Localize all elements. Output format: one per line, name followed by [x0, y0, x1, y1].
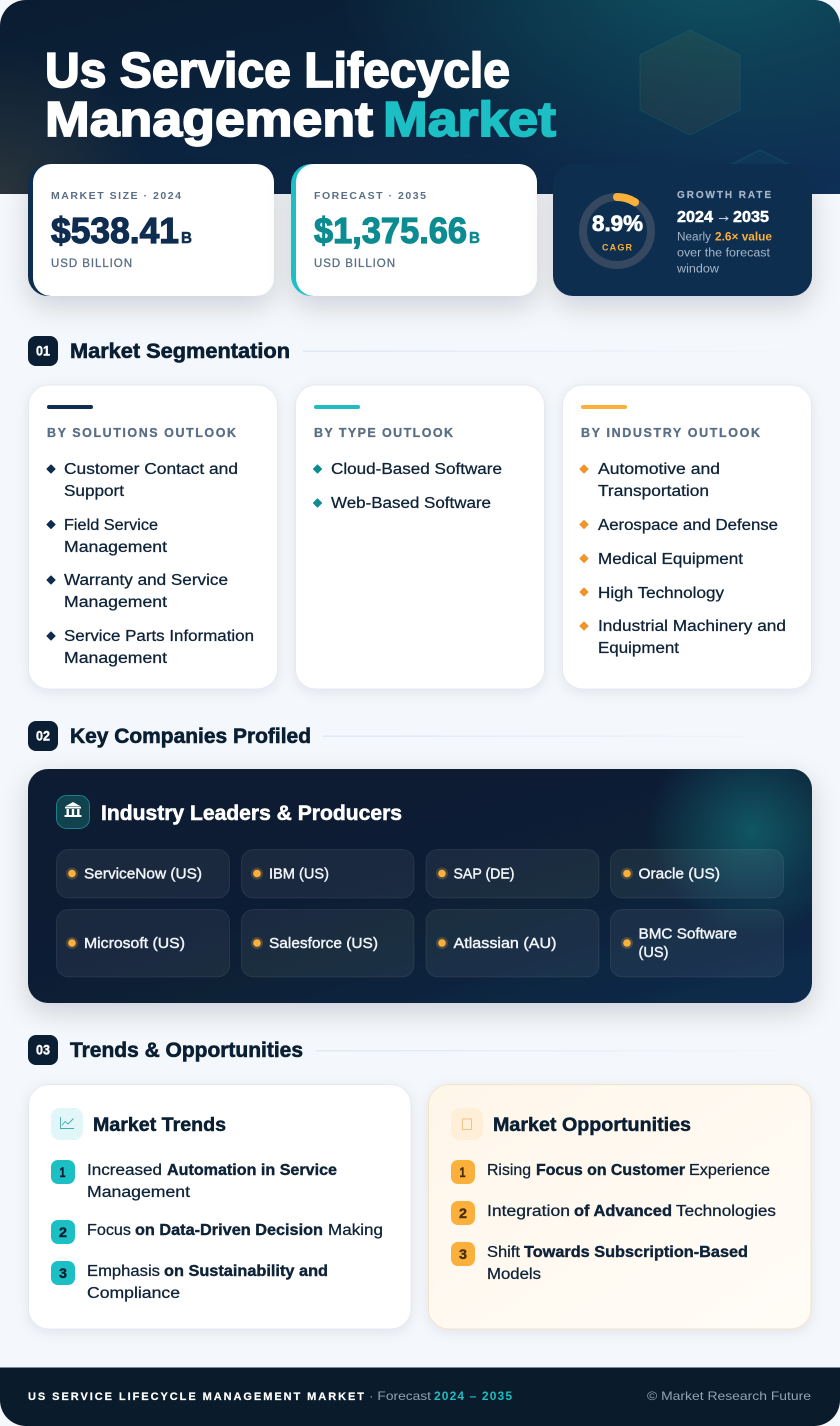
panel: by type outlook: Web-Based Software — [331, 495, 491, 512]
company: Oracle — [610, 850, 784, 898]
title: Market — [383, 92, 556, 147]
panel: market opportunities: Market Opportunities — [493, 1115, 691, 1136]
trend 1: Increased — [87, 1162, 162, 1179]
panel: by industry outlook — [562, 385, 812, 689]
panel: by solutions outlook: Warranty and Service — [64, 572, 228, 589]
panel: by solutions outlook: Management — [64, 594, 168, 611]
stat card: market size 2024: MARKET SIZE · 2024 — [51, 190, 181, 202]
opportunity 2: Technologies — [676, 1203, 776, 1220]
panel heading: Industry Leaders & Producers — [101, 802, 402, 825]
icon: classical building — [56, 796, 90, 828]
trend 1: Automation in Service — [167, 1162, 337, 1179]
opportunity 3: 3 — [459, 1247, 468, 1262]
opportunity 1: Experience — [689, 1162, 770, 1179]
panel: by type outlook: BY TYPE OUTLOOK — [314, 426, 453, 440]
stat card: market size 2024: $538.41 — [51, 210, 179, 251]
opportunity 1: Focus on Customer — [536, 1162, 685, 1179]
stat card: growth rate: Nearly — [677, 232, 711, 244]
trend 3: Compliance — [87, 1285, 180, 1302]
stat card: market size 2024: B — [181, 230, 192, 247]
stat card: forecast 2035: FORECAST · 2035 — [314, 190, 426, 202]
opportunity 3: Shift — [487, 1244, 521, 1261]
footer: © Market Research Future — [647, 1389, 811, 1403]
opportunity 3: Models — [487, 1266, 541, 1283]
panel: by industry outlook: Medical Equipment — [598, 551, 744, 568]
stat card: market size 2024: USD BILLION — [51, 258, 132, 270]
panel: by solutions outlook: Service Parts Information — [64, 628, 254, 645]
stat card: forecast 2035: $1,375.66 — [314, 210, 467, 251]
stat card: forecast 2035 — [291, 164, 537, 296]
trend 1: 1 — [60, 1165, 66, 1180]
section header 02 — [28, 721, 812, 751]
company: BMC Software: BMC Software — [638, 926, 737, 942]
trend 2 — [51, 1220, 383, 1244]
company: IBM: IBM (US) — [269, 866, 329, 882]
title: Management — [45, 92, 373, 147]
footer: US SERVICE LIFECYCLE MANAGEMENT MARKET — [28, 1391, 364, 1403]
icon: line chart — [51, 1108, 83, 1140]
title: Us Service Lifecycle — [45, 43, 510, 98]
opportunity 2: 2 — [459, 1206, 467, 1221]
company: Atlassian — [426, 910, 599, 977]
company: SAP — [426, 850, 599, 898]
panel: by type outlook — [296, 385, 544, 689]
stat card: growth rate: 2035 — [733, 209, 769, 226]
trend 3: Emphasis — [87, 1263, 160, 1280]
stat card: growth rate: window — [676, 264, 720, 276]
company: BMC Software: (US) — [638, 944, 669, 961]
company: ServiceNow: ServiceNow (US) — [84, 866, 202, 882]
section header 02: Key Companies Profiled — [70, 725, 311, 748]
panel: by type outlook: Cloud-Based Software — [331, 461, 502, 478]
opportunity 3: Towards Subscription-Based — [524, 1244, 748, 1261]
panel: by solutions outlook: BY SOLUTIONS OUTLOOK — [47, 426, 236, 440]
company: Atlassian: Atlassian (AU) — [454, 935, 557, 952]
trend 1 — [51, 1160, 337, 1201]
trend 1: Management — [87, 1184, 191, 1201]
stat card: growth rate: 2024 — [677, 209, 713, 226]
company: Microsoft — [56, 910, 230, 977]
panel: by industry outlook: Equipment — [598, 640, 680, 657]
footer: · Forecast — [369, 1389, 432, 1403]
panel: by solutions outlook — [28, 385, 278, 689]
opportunity 1: Rising — [487, 1162, 531, 1179]
stat card: market size 2024 — [28, 164, 274, 296]
footer: 2024 – 2035 — [434, 1389, 512, 1403]
section header 03: Trends & Opportunities — [70, 1039, 303, 1062]
panel: by industry outlook: High Technology — [598, 585, 724, 602]
panel: by solutions outlook: Management — [64, 539, 168, 556]
company: Salesforce — [242, 910, 414, 977]
icon: opportunity placeholder — [451, 1108, 483, 1140]
donut: CAGR: CAGR — [602, 242, 632, 252]
company: Oracle: Oracle (US) — [638, 866, 720, 882]
hero banner — [0, 0, 840, 194]
panel: market trends: Market Trends — [93, 1115, 226, 1136]
opportunity 2 — [451, 1201, 776, 1225]
company: IBM — [242, 850, 414, 898]
arrow: 2024 to 2035 — [719, 216, 728, 220]
donut: CAGR: 8.9% — [592, 211, 643, 236]
company: ServiceNow — [56, 850, 230, 898]
trend 3: on Sustainability and — [164, 1263, 328, 1280]
trend 2: 2 — [59, 1225, 67, 1240]
panel: market opportunities — [428, 1084, 811, 1329]
opportunity 1: 1 — [460, 1165, 466, 1180]
trend 2: on Data-Driven Decision — [135, 1222, 323, 1239]
section header 01: 01 — [36, 344, 50, 358]
stat card: forecast 2035: USD BILLION — [314, 258, 395, 270]
panel: by solutions outlook: Field Service — [64, 517, 158, 534]
stat card: growth rate — [553, 164, 812, 296]
opportunity 2: of Advanced — [574, 1203, 672, 1220]
company: SAP: SAP (DE) — [454, 866, 514, 882]
trend 3: 3 — [59, 1266, 68, 1281]
section header 01: Market Segmentation — [70, 340, 290, 363]
panel: by industry outlook: Aerospace and Defense — [598, 517, 778, 534]
panel: by industry outlook: BY INDUSTRY OUTLOOK — [581, 426, 760, 440]
panel: by solutions outlook: Management — [64, 650, 168, 667]
panel: market trends — [28, 1084, 411, 1329]
company: Microsoft: Microsoft (US) — [84, 935, 185, 952]
title — [45, 43, 556, 147]
stat card: growth rate: 2.6× value — [715, 232, 772, 244]
trend 2: Making — [328, 1222, 383, 1239]
panel: key companies — [28, 769, 812, 1003]
stat card: growth rate: over the forecast — [677, 248, 771, 260]
opportunity 1 — [451, 1160, 770, 1184]
opportunity 2: Integration — [487, 1203, 570, 1220]
donut: CAGR — [583, 197, 651, 265]
company: BMC Software — [610, 910, 784, 977]
panel: by solutions outlook: Support — [64, 483, 125, 500]
panel: by solutions outlook: Customer Contact and — [64, 461, 238, 478]
company: Salesforce: Salesforce (US) — [269, 935, 378, 952]
stat card: forecast 2035: B — [469, 230, 480, 247]
section header 02: 02 — [36, 728, 50, 744]
section header 01 — [28, 336, 812, 366]
trend 3 — [51, 1261, 328, 1302]
footer — [0, 1368, 840, 1426]
panel: by industry outlook: Automotive and — [598, 461, 720, 478]
opportunity 3 — [451, 1242, 748, 1283]
panel: by industry outlook: Transportation — [598, 483, 709, 500]
stat card: growth rate: GROWTH RATE — [677, 190, 771, 201]
panel: by industry outlook: Industrial Machinery and — [598, 618, 786, 635]
trend 2: Focus — [87, 1222, 131, 1239]
section header 03 — [28, 1035, 812, 1065]
section header 03: 03 — [36, 1042, 50, 1058]
